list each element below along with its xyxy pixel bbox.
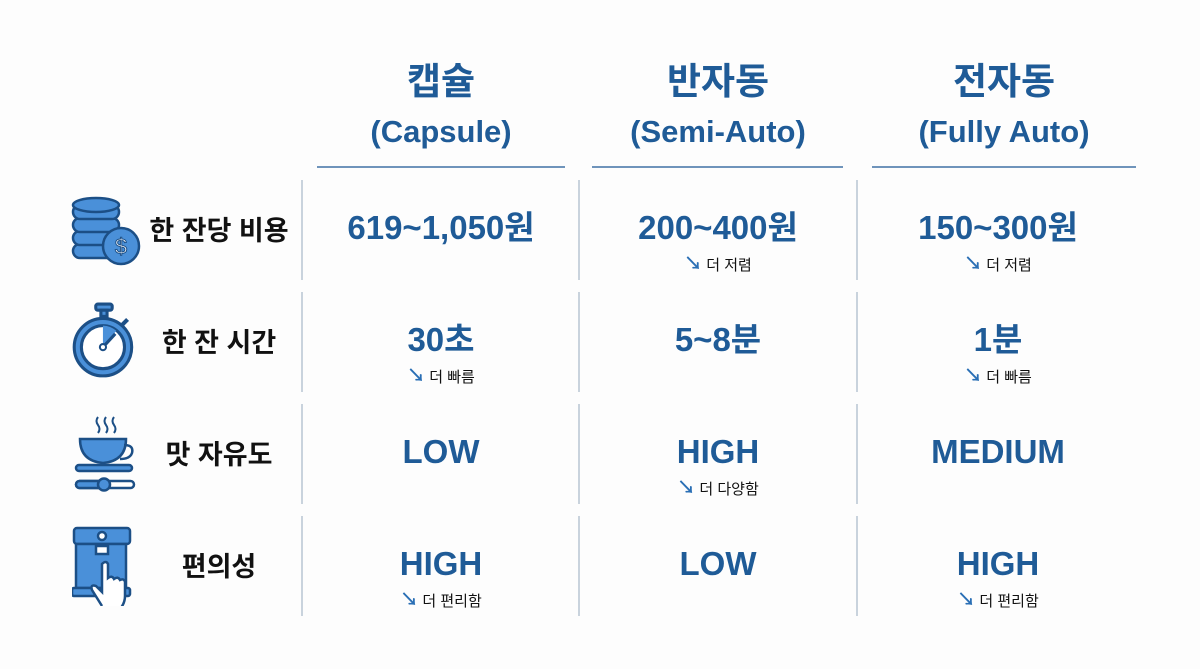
icon: stopwatch [72, 302, 134, 378]
header: semi-auto: (Semi-Auto) [630, 114, 806, 149]
row2 values: 30초 [407, 321, 475, 358]
text: HIGH [677, 433, 759, 470]
icon: coins: $ [115, 234, 127, 259]
text: 200~400원 [638, 209, 798, 246]
header: semi-auto: 반자동 [667, 61, 769, 102]
text: ↘ 더 저렴 [684, 254, 752, 274]
label: time: 한 잔 시간 [162, 328, 276, 358]
text: MEDIUM [931, 433, 1065, 470]
icon: machine [72, 526, 132, 606]
row3 values: LOW [402, 433, 479, 470]
text: ↘ 더 다양함 [677, 478, 759, 498]
text: HIGH [957, 545, 1039, 582]
icon: coins [72, 196, 140, 266]
header: fully auto: 전자동 [953, 61, 1055, 102]
label: cost: 한 잔당 비용 [149, 216, 289, 246]
text: ↘ 더 편리함 [957, 590, 1039, 610]
header: semi-auto [630, 61, 806, 149]
text: 1분 [974, 321, 1022, 358]
text: ↘ 더 편리함 [400, 590, 482, 610]
label: convenience: 편의성 [182, 552, 256, 582]
header: fully auto [918, 61, 1090, 149]
header: fully auto: (Fully Auto) [918, 114, 1090, 149]
text: LOW [680, 545, 756, 582]
row4 values: HIGH [400, 545, 482, 582]
header: capsule [370, 61, 512, 149]
row1 values: 619~1,050원 [347, 209, 535, 246]
header: capsule: 캡슐 [407, 61, 475, 102]
header: capsule: (Capsule) [370, 114, 512, 149]
text: 5~8분 [675, 321, 761, 358]
text: ↘ 더 빠름 [964, 366, 1032, 386]
label: taste freedom: 맛 자유도 [166, 440, 272, 470]
text: ↘ 더 저렴 [964, 254, 1032, 274]
text: ↘ 더 빠름 [407, 366, 475, 386]
icon: cup [74, 416, 136, 492]
text: 150~300원 [918, 209, 1078, 246]
